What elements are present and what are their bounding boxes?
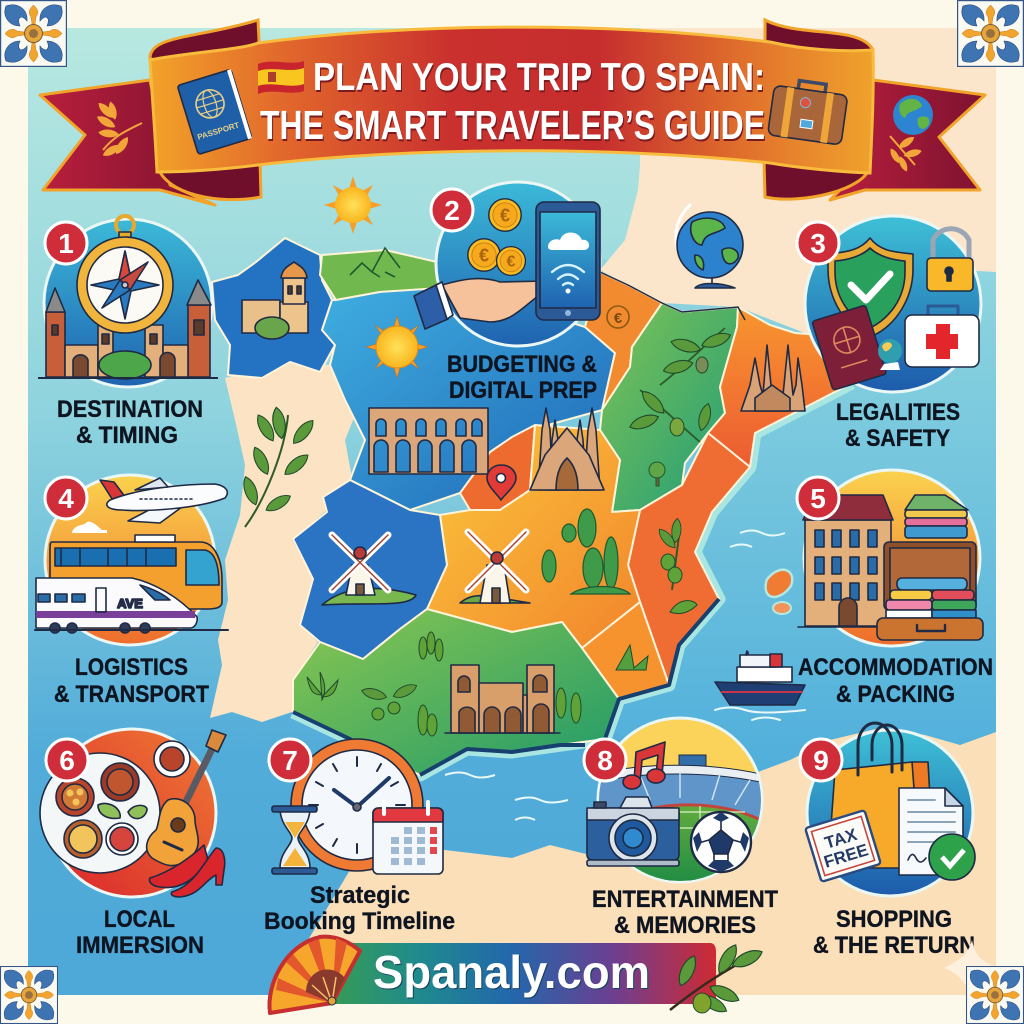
icon: windmill La Mancha: [460, 532, 530, 603]
icon: ship: [715, 651, 805, 720]
region: Andalusia: [293, 609, 619, 775]
badge 3: [797, 222, 839, 264]
icon: padlock: [927, 229, 973, 291]
website logo bar: [269, 937, 765, 1016]
label 7: Strategic: [310, 882, 410, 909]
icon: right tail globe: [893, 95, 933, 135]
icon: waves: [445, 530, 785, 820]
tile: top left: [0, 0, 66, 66]
badge 9: 9: [813, 745, 829, 776]
icon: map pin: [487, 465, 516, 500]
icon: palm Murcia: [616, 645, 648, 670]
panel 9 circle: [807, 730, 973, 896]
region: Catalonia: [708, 307, 852, 467]
icon: right tail leaf: [888, 134, 923, 173]
icon: sun on map: [366, 316, 428, 378]
icon: castle Andalusia: [445, 665, 560, 733]
badge 2: 2: [444, 195, 460, 226]
icon: small tree: [649, 462, 665, 486]
icon: receipt document: [899, 788, 963, 875]
icon: euro outline on map: €: [614, 310, 623, 327]
icon: stadium: [595, 755, 770, 885]
panel 6: local immersion: [40, 729, 226, 959]
badge 7: 7: [282, 745, 298, 776]
badge 8: 8: [597, 745, 613, 776]
icon: hotel: [798, 495, 893, 627]
icon: hand: [414, 279, 547, 329]
icon: olive branch: [670, 942, 765, 1016]
icon: shopping bag: [828, 723, 934, 868]
label 6: LOCAL: [104, 906, 175, 933]
icon: spanish flag: [258, 61, 304, 94]
title text: THE SMART TRAVELER’S GUIDE: [260, 102, 765, 148]
icon: left tail laurel: [95, 100, 142, 159]
badge 5: [797, 477, 839, 519]
label 2: DIGITAL PREP: [449, 377, 597, 404]
badge 6: 6: [59, 745, 75, 776]
icon: sagrada familia: [530, 408, 604, 490]
panel 1 circle: [44, 219, 212, 387]
label 6: IMMERSION: [76, 932, 204, 959]
label 3: LEGALITIES: [836, 399, 960, 426]
panel 7: strategic booking timeline: [264, 739, 455, 935]
panel 2: budgeting and digital prep: [414, 182, 600, 404]
icon: cloud: [72, 522, 107, 533]
icon: aqueduct: [369, 408, 488, 474]
region: Aragon: [600, 303, 738, 512]
banner main ribbon: [150, 27, 873, 173]
panel 9: shopping and the return: [800, 723, 975, 959]
region: Madrid: [460, 425, 535, 510]
icon: balearic islands: [767, 571, 791, 613]
label 8: & MEMORIES: [614, 912, 756, 939]
icon: euro outline on map: [607, 306, 629, 328]
icon: smartphone: [536, 202, 600, 320]
logo bar background: [305, 943, 716, 1004]
tile: bottom left: [0, 966, 58, 1024]
badge 3: 3: [810, 228, 826, 259]
region: Valencia: [628, 433, 750, 685]
icon: suitcase: [768, 77, 849, 145]
label 2: BUDGETING &: [447, 351, 597, 378]
label 3: [836, 399, 960, 452]
icon: tax free stamp: FREE: [822, 840, 871, 872]
icon: tax free stamp: [805, 810, 881, 882]
badge 7: [269, 739, 311, 781]
region: Extremadura: [293, 480, 447, 659]
icon: guitar: [147, 730, 226, 866]
icon: plants Andalusia: [307, 632, 581, 736]
label 5: & PACKING: [836, 681, 955, 708]
badge 4: [45, 477, 87, 519]
label 8: ENTERTAINMENT: [592, 886, 778, 913]
label 4: LOGISTICS: [75, 654, 188, 681]
label 9: [813, 906, 975, 959]
label 4: [54, 654, 209, 708]
panel 5 circle: [804, 470, 980, 646]
map of Spain regions: [212, 238, 852, 775]
region: Asturias and Cantabria: [320, 250, 440, 300]
banner right curls: [764, 20, 873, 199]
icon: first-aid kit: [905, 306, 979, 367]
label 4: & TRANSPORT: [54, 681, 209, 708]
icon: high-speed train: [35, 578, 228, 633]
banner left tail: [40, 80, 215, 205]
icon: bus: [50, 535, 222, 609]
icon: compass: [77, 216, 173, 333]
icon: olive branch on Portugal: [240, 406, 317, 527]
badge 1: [45, 222, 87, 264]
label 1: [57, 396, 203, 449]
icon: passport: PASSPORT: [196, 120, 241, 142]
icon: flamenco shoes: [149, 845, 225, 897]
icon: clothes stack: [905, 495, 968, 538]
icon: cathedral: [741, 345, 805, 411]
icon: tax free stamp: TAX: [822, 825, 860, 853]
icon: shield: [828, 238, 913, 337]
icon: euro coins: [468, 199, 525, 275]
icon: open suitcase: [877, 542, 983, 640]
icon: calendar: [373, 802, 443, 874]
panel 2 circle: [436, 182, 600, 346]
label 5: ACCOMMODATION: [798, 654, 993, 681]
icon: clock: [291, 739, 423, 871]
label 5: [798, 654, 993, 708]
badge 9: [800, 739, 842, 781]
title banner: [40, 20, 985, 205]
icon: fan: [269, 937, 360, 1013]
ground line: [38, 377, 218, 379]
icon: olive branch one: [660, 328, 732, 385]
title text: [260, 56, 765, 148]
region: Basque and Navarra: [585, 272, 662, 410]
label 1: DESTINATION: [57, 396, 203, 423]
badge 5: 5: [810, 483, 826, 514]
icon: green hills: [350, 248, 400, 277]
icon: high-speed train: AVE: [117, 596, 143, 611]
icon: galicia tower: [242, 262, 308, 339]
icon: tapas plate: [40, 753, 160, 873]
icon: small globe: [878, 339, 902, 370]
icon: buildings: [46, 280, 211, 379]
icon: airplane: [100, 478, 227, 523]
icon: passport: [177, 69, 252, 155]
panel 8 circle: [598, 718, 762, 882]
tile: top right: [958, 0, 1024, 66]
badge 6: [46, 739, 88, 781]
region: Murcia: [582, 602, 669, 699]
icon: check mark: [929, 834, 975, 880]
icon: windmill Extremadura: [322, 535, 416, 605]
label 1: & TIMING: [76, 422, 178, 449]
region: Castilla-La Mancha: [427, 425, 640, 648]
badge 2: [431, 189, 473, 231]
badge 4: 4: [58, 483, 74, 514]
panel 8: entertainment and memories: [584, 718, 778, 939]
label 2: [447, 351, 597, 404]
label 9: & THE RETURN: [813, 932, 975, 959]
logo text: Spanaly.com: [373, 946, 650, 998]
icon: soccer ball: [691, 812, 751, 872]
badge 8: [584, 739, 626, 781]
icon: olive branch Valencia: [656, 518, 682, 590]
panel 4 circle: [45, 475, 215, 645]
label 6: [76, 906, 204, 959]
icon: desk globe: [676, 205, 743, 288]
label 3: & SAFETY: [845, 425, 950, 452]
icon: sun top: [324, 176, 382, 234]
decorative sparkle: [944, 940, 992, 985]
banner left curls: [150, 20, 261, 200]
land: Portugal: [210, 362, 362, 722]
label 8: [592, 886, 778, 939]
icon: music note: [623, 742, 665, 789]
banner right tail: [830, 80, 985, 200]
panel 3 circle: [805, 216, 981, 392]
icon: leaf Valencia: [670, 601, 697, 614]
title text: PLAN YOUR TRIP TO SPAIN:: [313, 56, 765, 99]
panel 4: logistics and transport: [35, 475, 228, 708]
panel 3: legalities and safety: [797, 216, 981, 452]
panel 1: destination and timing: [38, 216, 218, 449]
icon: trees on la mancha: [542, 509, 630, 594]
tile: bottom right: [966, 966, 1024, 1024]
icon: olive branch two: [628, 388, 713, 442]
icon: hourglass: [272, 806, 317, 874]
icon: camera: [587, 797, 679, 866]
region: Castilla y Leon: [322, 288, 615, 510]
icon: small sauce bowl: [154, 741, 190, 777]
icon: maroon passport: [812, 305, 887, 390]
label 7: Booking Timeline: [264, 908, 455, 935]
badge 1: 1: [58, 228, 74, 259]
label 9: SHOPPING: [836, 906, 952, 933]
label 7: [264, 882, 455, 935]
panel 5: accommodation and packing: [797, 470, 993, 708]
region: Galicia: [212, 238, 335, 378]
panel 6 circle: [48, 729, 216, 897]
